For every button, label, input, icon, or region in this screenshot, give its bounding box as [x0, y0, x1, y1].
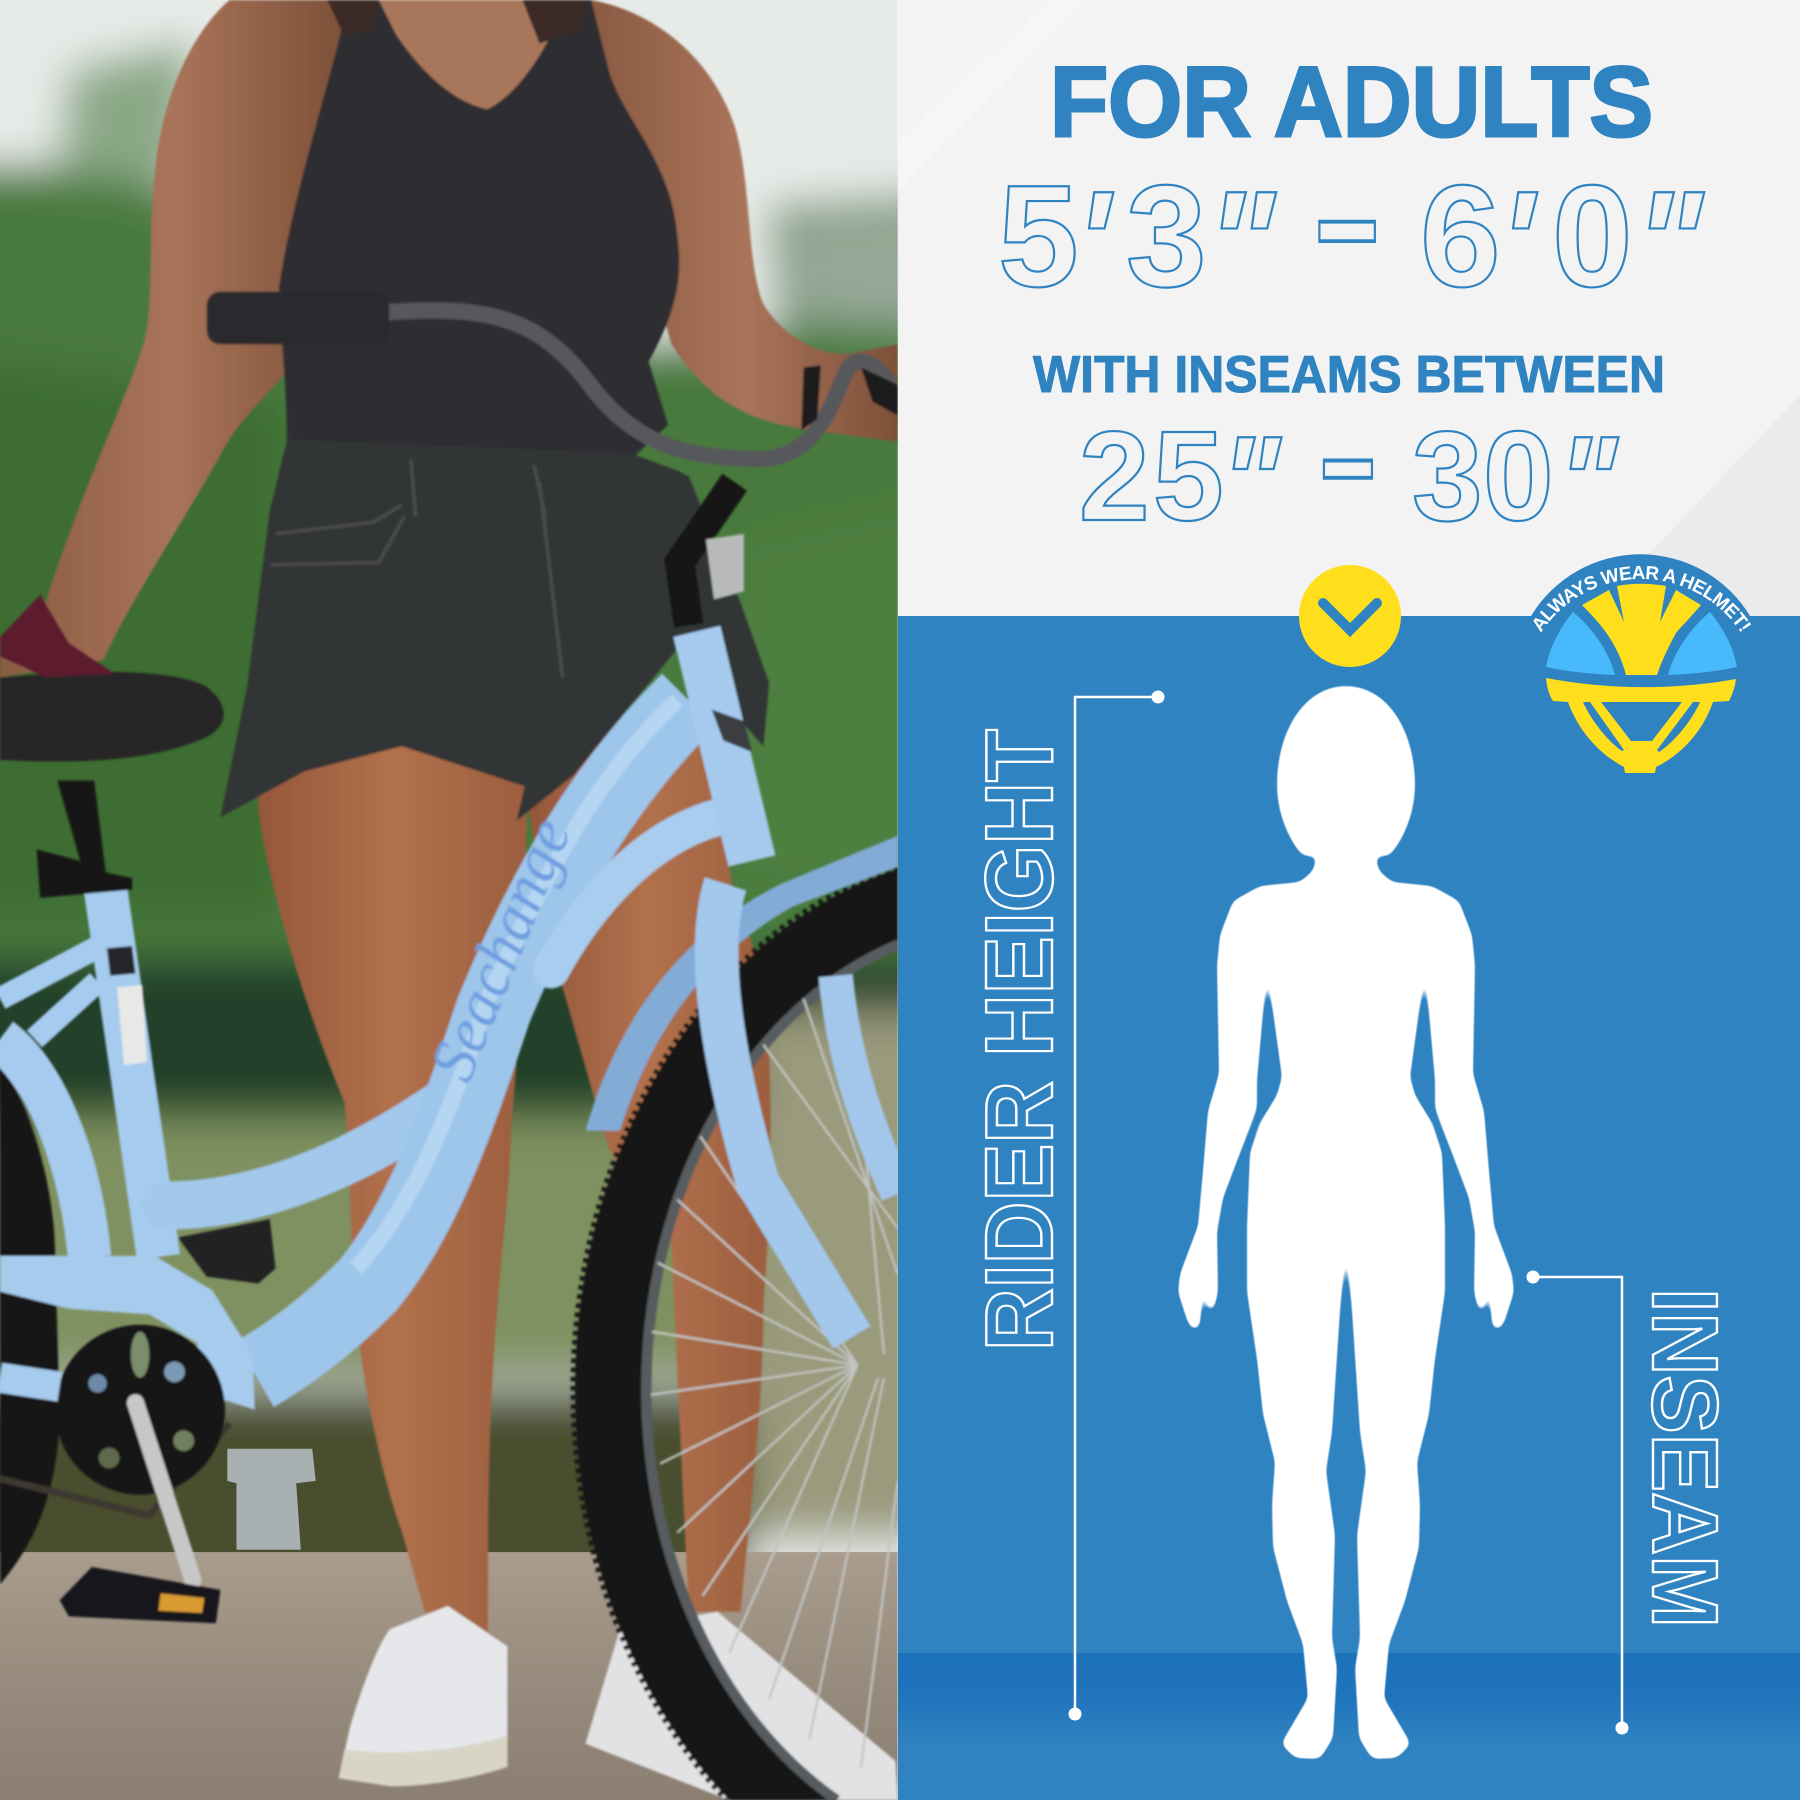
- chain: [0, 1424, 230, 1515]
- fork blade: [717, 884, 852, 1337]
- rear tire: [0, 1061, 60, 1584]
- rider height bracket: [1068, 690, 1164, 1720]
- hair: [327, 0, 588, 44]
- second fork blade: [836, 976, 898, 1194]
- front fender: [585, 836, 898, 1131]
- height range: ': [1499, 161, 1538, 323]
- inseam label: INSEAM: [1633, 1288, 1737, 1628]
- sprocket: [55, 1325, 225, 1495]
- scrunchie: [0, 595, 115, 677]
- chain guard: [0, 1256, 255, 1410]
- photo background: sky, foliage, grass and water: [0, 0, 898, 1581]
- main tube highlight: [356, 700, 677, 1269]
- near sneaker: [339, 1606, 507, 1786]
- human silhouette: [1178, 686, 1514, 1759]
- seat tube: [106, 890, 158, 1257]
- height range: 0: [1552, 155, 1633, 317]
- pedal: [60, 1567, 220, 1623]
- main frame tube: [255, 700, 689, 1374]
- seat post and clamp: [37, 781, 132, 898]
- height range: ": [1634, 161, 1705, 323]
- icon: always wear a helmet badge: [1531, 554, 1752, 773]
- inseam subheading: WITH INSEAMS BETWEEN: [1033, 346, 1665, 404]
- right arm: [591, 0, 898, 442]
- far sneaker: [585, 1612, 898, 1800]
- wooden deck: [0, 1552, 898, 1800]
- inseam range: ": [1220, 410, 1282, 552]
- inseam range: –: [1321, 358, 1375, 553]
- height range: 5: [998, 155, 1079, 317]
- helmet brim and straps: [1546, 678, 1736, 773]
- dock post: [227, 1449, 316, 1550]
- front wheel tire: [575, 869, 898, 1800]
- shorts pocket and seams: [271, 459, 563, 677]
- badge curved text: ALWAYS WEAR A HELMET!: [1533, 566, 1752, 632]
- far leg: [528, 735, 770, 1612]
- denim shorts: [220, 440, 769, 821]
- rider height label: RIDER HEIGHT: [966, 729, 1073, 1351]
- tank top: [279, 0, 679, 459]
- title: FOR ADULTS: [1050, 46, 1653, 157]
- rider and bicycle: [0, 0, 898, 1800]
- panel: bike photo: [0, 0, 898, 1800]
- right grip and hand strap: [801, 365, 898, 430]
- chest and neck: [378, 0, 549, 110]
- pedal reflector: [158, 1593, 204, 1613]
- stem: [680, 482, 735, 626]
- near sneaker sole: [339, 1736, 507, 1786]
- height range: –: [1316, 107, 1378, 326]
- inseam range: 0: [1483, 405, 1554, 547]
- helmet top shell: [1582, 584, 1701, 675]
- handlebar: [388, 310, 891, 459]
- inseam range: [1079, 358, 1619, 553]
- spokes: [651, 976, 898, 1768]
- handlebar grip: [207, 292, 389, 344]
- left arm: [0, 0, 344, 677]
- inseam bracket: [1526, 1270, 1628, 1734]
- head tube badge: [712, 709, 752, 752]
- panel: sizing information background: [898, 0, 1800, 1800]
- inseam range: ": [1557, 410, 1619, 552]
- rear fender: [0, 1039, 90, 1257]
- helmet side vents: [1546, 612, 1737, 675]
- near leg: [258, 735, 528, 1635]
- rear upper tube: [0, 947, 98, 1039]
- inseam range: 5: [1153, 405, 1224, 547]
- tire tread: [573, 867, 898, 1800]
- upper frame tube: [551, 817, 718, 970]
- height range: ": [1206, 161, 1277, 323]
- height range: 3: [1126, 155, 1207, 317]
- reflector: [706, 534, 744, 599]
- wheel rim: [646, 945, 898, 1800]
- seat tube stickers: [107, 946, 135, 976]
- rear pedal: [178, 1219, 276, 1283]
- inseam range: 3: [1412, 405, 1483, 547]
- chainstay: [0, 1378, 60, 1387]
- crank arm: [135, 1403, 193, 1580]
- height range: ': [1075, 161, 1114, 323]
- height range: 6: [1420, 155, 1501, 317]
- head tube: [697, 631, 752, 861]
- saddle: [0, 672, 224, 762]
- height range: [998, 107, 1705, 326]
- inseam range: 2: [1079, 405, 1150, 547]
- lower frame tube: [166, 1104, 442, 1205]
- brand script on frame: Seachange: [416, 808, 585, 1090]
- icon: yellow chevron badge: [1299, 565, 1401, 667]
